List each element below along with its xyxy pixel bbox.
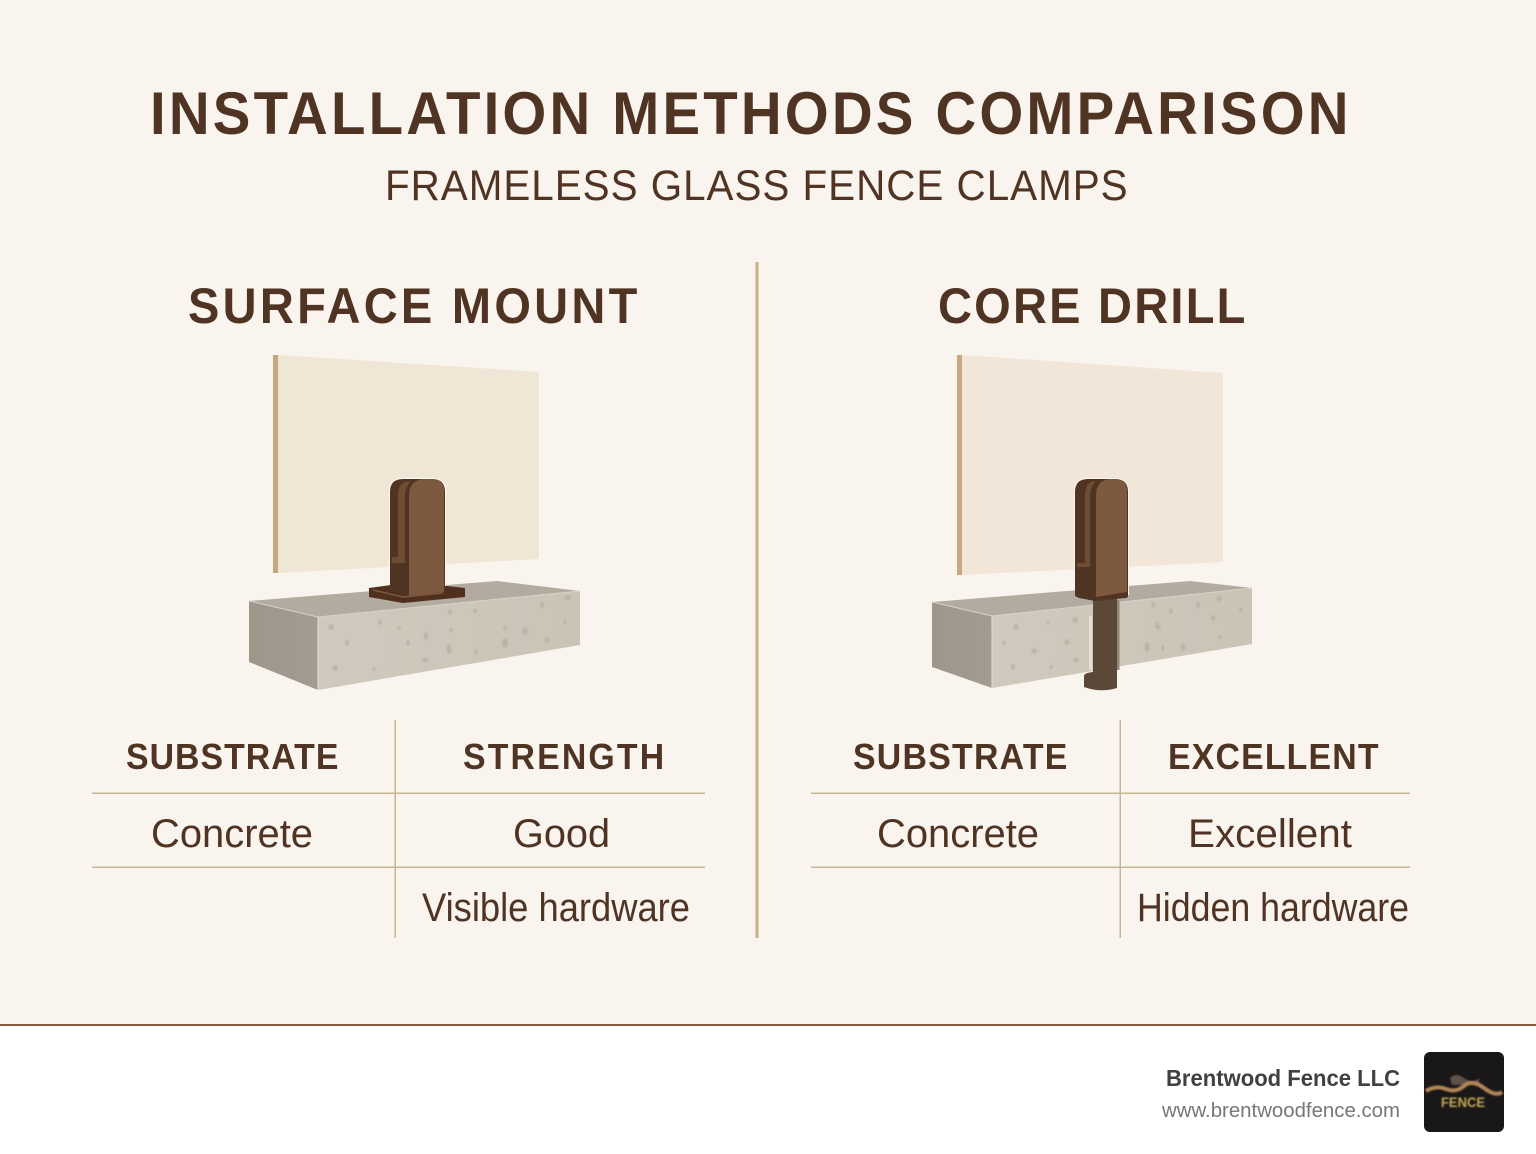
table: surface mount: Concrete	[151, 812, 313, 856]
table: surface mount: Visible hardware	[422, 886, 690, 930]
website: www.brentwoodfence.com	[1161, 1100, 1400, 1122]
table: core drill: SUBSTRATE	[853, 737, 1067, 777]
table: core drill: Concrete	[877, 812, 1039, 856]
center divider	[756, 262, 758, 938]
table: surface mount: Good	[513, 812, 610, 856]
illustration: surface mount clamp	[249, 355, 580, 690]
illustration: core drill clamp	[932, 355, 1252, 690]
table: core drill: EXCELLENT	[1168, 737, 1379, 777]
table: core drill: Excellent	[1188, 812, 1352, 856]
table: core drill: Hidden hardware	[1137, 886, 1409, 930]
logo: FENCE	[1441, 1094, 1485, 1110]
panel: surface mount	[92, 279, 705, 938]
footer	[0, 1024, 1536, 1154]
table: surface mount	[92, 720, 705, 938]
company name: Brentwood Fence LLC	[1166, 1065, 1400, 1091]
title: INSTALLATION METHODS COMPARISON	[150, 80, 1348, 147]
table: surface mount: SUBSTRATE	[126, 737, 338, 777]
heading: surface mount: SURFACE MOUNT	[188, 279, 638, 334]
logo	[1424, 1052, 1504, 1132]
panel: core drill	[811, 279, 1410, 938]
heading: core drill: CORE DRILL	[938, 279, 1245, 334]
table: core drill	[811, 720, 1410, 938]
table: surface mount: STRENGTH	[463, 737, 664, 777]
subtitle: FRAMELESS GLASS FENCE CLAMPS	[385, 161, 1128, 209]
